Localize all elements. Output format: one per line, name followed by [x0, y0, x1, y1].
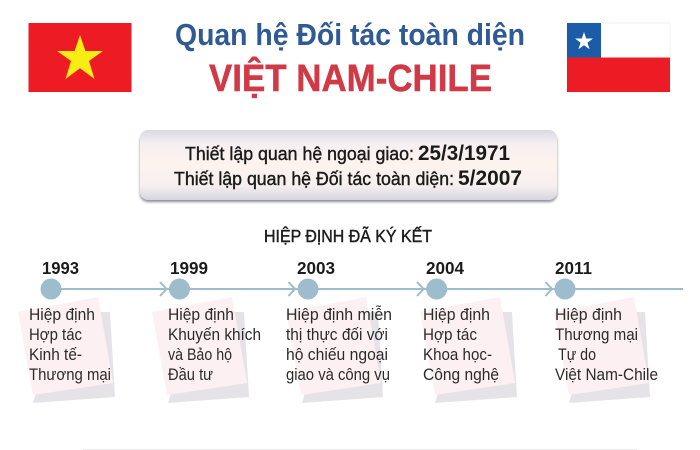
- timeline item: 2003: Hiệp định miễn: [286, 305, 392, 324]
- timeline item: 1993: Kinh tế-: [29, 346, 82, 364]
- timeline item: 1999: Khuyến khích: [168, 326, 261, 344]
- timeline item: 2004: Hợp tác: [423, 326, 477, 344]
- timeline item: 2003: thị thực đối với: [286, 326, 388, 344]
- heading: signed agreements: HIỆP ĐỊNH ĐÃ KÝ KẾT: [264, 225, 432, 246]
- clipped text strip at bottom edge: [83, 449, 637, 450]
- text: comprehensive partnership date: Thiết lập quan hệ Đối tác toàn diện:: [174, 168, 454, 189]
- text: diplomatic relations date: [185, 142, 510, 165]
- timeline item: 1993: Thương mại: [29, 366, 111, 384]
- timeline item: 2004: Khoa học-: [423, 346, 492, 364]
- panel: diplomatic relations dates: [140, 130, 557, 202]
- timeline item: 2004: Công nghệ: [423, 366, 499, 384]
- timeline item: 1999: Hiệp định: [168, 306, 234, 324]
- timeline item: 2003: hộ chiếu ngoại: [286, 346, 388, 364]
- timeline item: 2011: Tự do: [558, 346, 596, 364]
- timeline item: 2003: 2003: [297, 258, 335, 278]
- timeline item: 1999: Đầu tư: [168, 366, 213, 384]
- timeline item: 1999: [152, 258, 261, 403]
- timeline item: 1993: Hợp tác: [29, 326, 82, 344]
- timeline item: 2011: Hiệp định: [555, 306, 622, 324]
- title: Quan hệ Đối tác toàn diện: [175, 17, 525, 52]
- timeline item: 1993: Hiệp định: [29, 306, 95, 324]
- timeline item: 2004: Hiệp định: [423, 306, 490, 324]
- flag: Chile: [567, 23, 670, 92]
- timeline item: 1993: 1993: [42, 258, 79, 278]
- timeline item: 2004: [420, 258, 517, 403]
- flag: Vietnam: [28, 23, 132, 92]
- timeline line: [51, 282, 683, 296]
- text: comprehensive partnership date: 5/2007: [458, 167, 522, 190]
- text: diplomatic relations date: 25/3/1971: [418, 142, 510, 165]
- timeline item: 1999: 1999: [170, 258, 208, 278]
- title: [175, 17, 525, 100]
- title: VIỆT NAM-CHILE: [209, 56, 492, 100]
- timeline item: 1999: và Bảo hộ: [168, 346, 232, 364]
- timeline item: 2003: [286, 258, 392, 403]
- timeline item: 2011: 2011: [555, 258, 592, 278]
- timeline item: 2003: giao và công vụ: [286, 366, 390, 384]
- timeline item: 1993: [18, 258, 115, 403]
- timeline item: 2004: 2004: [426, 258, 464, 278]
- timeline item: 2011: Thương mại: [555, 326, 638, 344]
- text: diplomatic relations date: Thiết lập quan hệ ngoại giao:: [185, 143, 414, 164]
- timeline item: 2011: [554, 258, 658, 403]
- timeline item: 2011: Việt Nam-Chile: [555, 366, 658, 384]
